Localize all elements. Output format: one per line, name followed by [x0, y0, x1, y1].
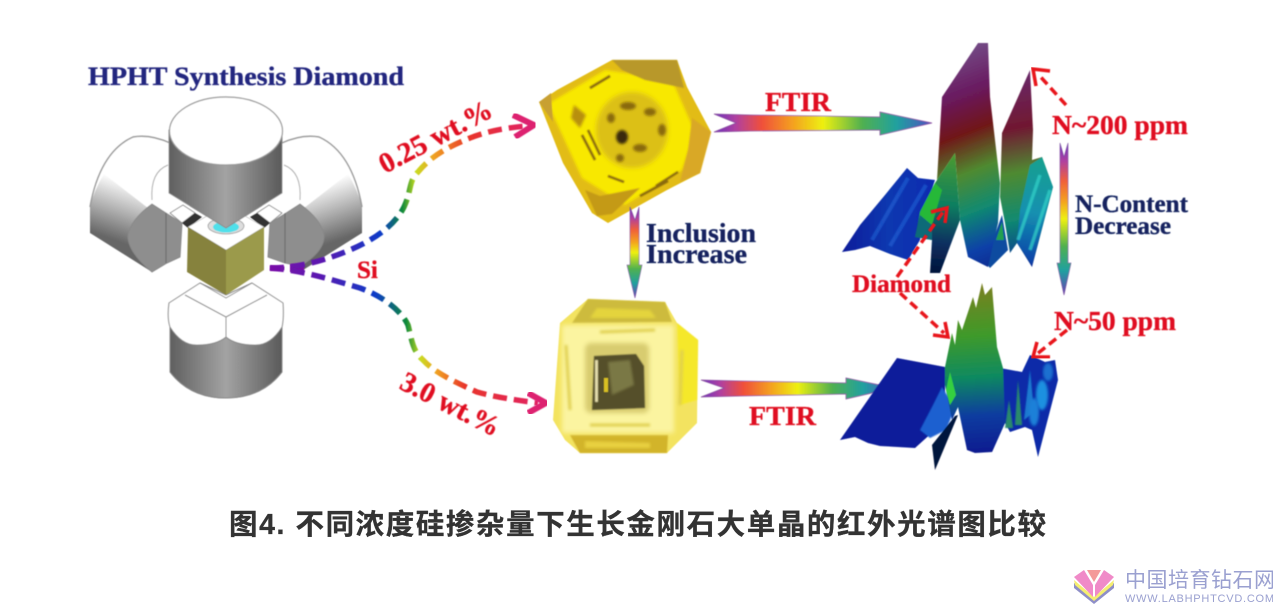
main peaks — [945, 283, 1005, 453]
chart: upper 3D FTIR spectrum — [842, 43, 1053, 273]
dashed arrow: N~50 to peak — [1033, 330, 1067, 357]
arrowhead: 0.25 wt.% — [513, 115, 534, 137]
label: N-Content Decrease: Decrease — [1075, 213, 1171, 240]
label: 3.0 wt.%: 3.0 wt.% — [395, 367, 505, 443]
label: N~50 ppm: N~50 ppm — [1054, 305, 1176, 336]
left sheet — [842, 168, 935, 260]
label: N-Content Decrease — [1075, 191, 1189, 240]
watermark text — [1125, 569, 1273, 604]
left rear anvil — [90, 136, 202, 272]
arrow: FTIR lower — [701, 378, 894, 399]
label: Inclusion Increase: Inclusion — [646, 218, 756, 248]
bottom anvil — [168, 283, 283, 398]
main peak front face — [915, 153, 960, 273]
gap sheet — [985, 215, 1008, 268]
label: FTIR upper: FTIR — [765, 87, 832, 117]
caption: 图4. 不同浓度硅掺杂量下生长金刚石大单晶的红外光谱图比较 — [229, 508, 1046, 541]
title: HPHT Synthesis Diamond: HPHT Synthesis Diamond — [88, 62, 405, 91]
arrow: inclusion increase — [627, 207, 642, 298]
crystal: upper diamond — [539, 60, 711, 223]
diagram: HPHT cubic press — [90, 97, 362, 398]
dashed arrow: Diamond to lower peak — [900, 293, 948, 337]
label: Inclusion Increase — [646, 218, 756, 269]
label: 0.25 wt.%: 0.25 wt.% — [374, 95, 498, 180]
blue bumps — [920, 387, 955, 438]
dashed arrow: N~200 to peak — [1033, 69, 1066, 105]
label: Diamond: Diamond — [852, 271, 951, 298]
purple junction block — [290, 264, 304, 272]
main peak — [937, 43, 1000, 267]
teal ridges — [1017, 157, 1053, 265]
dashed arrow: Diamond to upper peak — [897, 208, 947, 277]
arrow: N-content decrease — [1057, 143, 1071, 295]
arrowhead: 3.0 wt.% — [528, 393, 546, 413]
arrow: FTIR upper — [714, 112, 932, 135]
label: Inclusion Increase: Increase — [646, 239, 747, 269]
second peak — [1000, 70, 1053, 267]
right rear anvil — [250, 136, 362, 272]
label: Si: Si — [357, 257, 378, 284]
dashed path: 0.25 wt.% route — [270, 126, 526, 268]
watermark text: 中国培育钻石网 — [1125, 569, 1273, 592]
label: N~200 ppm: N~200 ppm — [1052, 109, 1188, 140]
right sheet — [992, 355, 1058, 457]
chart: lower 3D FTIR spectrum — [840, 283, 1058, 470]
label: FTIR lower: FTIR — [749, 401, 817, 431]
top anvil — [169, 97, 282, 228]
watermark logo icon — [1074, 570, 1114, 604]
sample cube — [187, 205, 264, 295]
crystal: lower diamond — [553, 299, 698, 453]
label: N-Content Decrease: N-Content — [1075, 191, 1189, 218]
flat sheet — [840, 358, 945, 448]
dashed path: 3.0 wt.% route — [270, 268, 538, 403]
